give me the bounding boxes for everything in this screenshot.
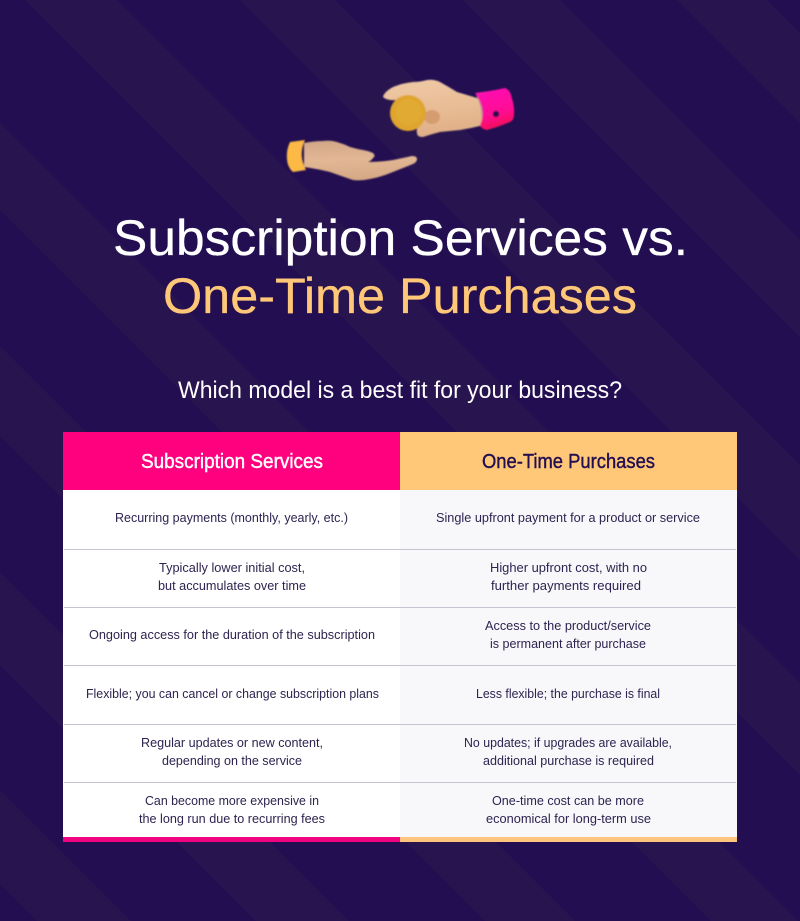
row 1 right: Single upfront payment for a product or service: [436, 510, 700, 525]
row 2 left: [158, 560, 306, 593]
row 6 left: Can become more expensive in: [145, 793, 319, 808]
row 3 right: is permanent after purchase: [490, 636, 646, 651]
row 2 right: Higher upfront cost, with no: [490, 560, 647, 575]
upper hand: [383, 80, 484, 137]
row 4 right: Less flexible; the purchase is final: [476, 686, 660, 701]
title: [113, 210, 688, 324]
table cells text: [86, 510, 700, 826]
coin face: [396, 99, 422, 125]
header: one-time purchases: One-Time Purchases: [482, 451, 655, 473]
row 6 left: the long run due to recurring fees: [139, 811, 325, 826]
left column background: [63, 490, 400, 837]
row 3 right: [485, 618, 651, 651]
row 3 right: Access to the product/service: [485, 618, 651, 633]
title line 1: Subscription Services vs.: [113, 210, 688, 266]
finger shadow behind coin: [424, 110, 440, 124]
header: subscription services: Subscription Services: [141, 451, 323, 473]
bracelet edge: [477, 96, 482, 126]
row 2 left: Typically lower initial cost,: [159, 560, 305, 575]
row 2 right: further payments required: [491, 578, 641, 593]
title line 2: One-Time Purchases: [163, 268, 637, 324]
header: subscription services: [63, 432, 400, 490]
row 6 left: [139, 793, 325, 826]
row 5 right: [464, 735, 672, 768]
comparison table: [63, 432, 737, 842]
row 5 right: additional purchase is required: [483, 753, 654, 768]
icon: lower open hand: [287, 140, 417, 180]
row 2 left: but accumulates over time: [158, 578, 306, 593]
coin: [390, 95, 426, 131]
row 5 left: Regular updates or new content,: [141, 735, 323, 750]
cuff button: [493, 111, 499, 117]
row 6 right: One-time cost can be more: [492, 793, 644, 808]
pink cuff: [475, 88, 514, 130]
lower hand: [304, 141, 417, 180]
row 6 right: [486, 793, 651, 826]
row 1 left: Recurring payments (monthly, yearly, etc.): [115, 510, 348, 525]
right column bottom bar: [400, 837, 737, 842]
subtitle: Which model is a best fit for your business?: [178, 377, 622, 404]
header: one-time purchases: [400, 432, 737, 490]
row 4 left: Flexible; you can cancel or change subscription plans: [86, 686, 379, 701]
row 5 left: depending on the service: [162, 753, 302, 768]
row 6 right: economical for long-term use: [486, 811, 651, 826]
yellow wristband: [287, 140, 306, 172]
row 2 right: [490, 560, 647, 593]
row 5 left: [141, 735, 323, 768]
row 5 right: No updates; if upgrades are available,: [464, 735, 672, 750]
icon: upper hand holding coin: [383, 80, 514, 137]
right column background: [400, 490, 737, 837]
left column bottom bar: [63, 837, 400, 842]
row 3 left: Ongoing access for the duration of the subscription: [89, 627, 375, 642]
